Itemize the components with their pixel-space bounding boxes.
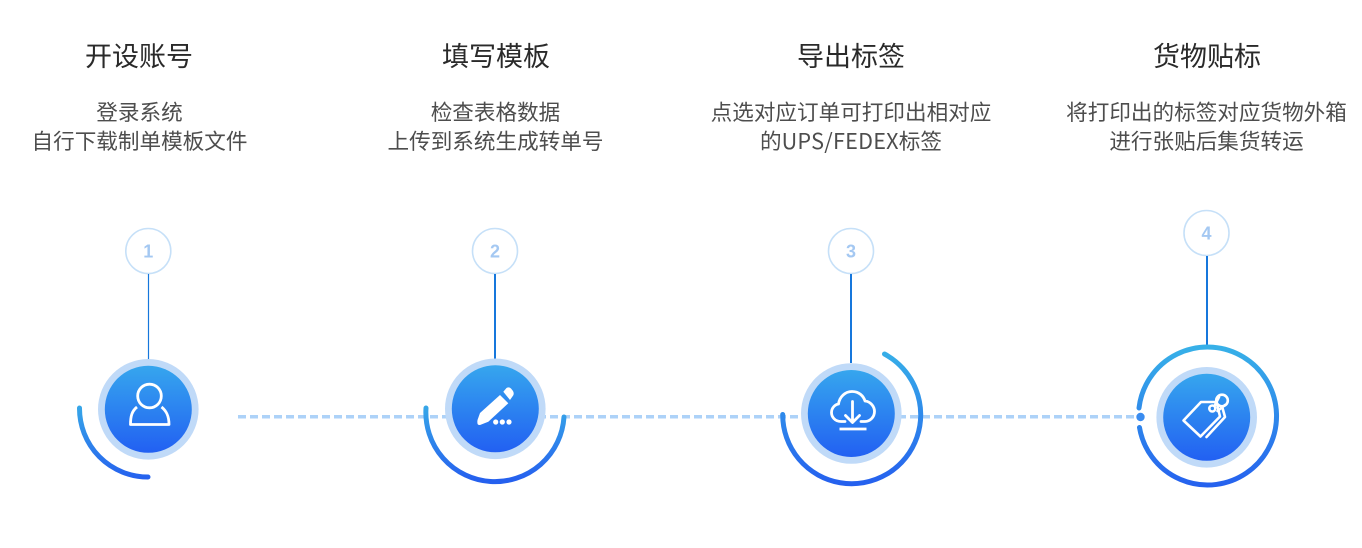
icon: cloud download: [832, 392, 874, 429]
progress arc 2: [426, 408, 564, 482]
text: step 3 description: 点选对应订单可打印出相对应: [711, 100, 991, 125]
stem line 2: [494, 274, 496, 363]
text: step 3 description: 的UPS/FEDEX标签: [760, 125, 942, 156]
number badge 4: [1184, 210, 1229, 256]
icon circle 1: [98, 359, 199, 460]
progress ring 4: [1139, 347, 1277, 485]
progress arc 1: [79, 408, 148, 477]
progress arc 3: [783, 354, 921, 484]
text: step 4 description: [1066, 100, 1347, 154]
stem line 1: [148, 274, 150, 360]
text: step 1 description: 登录系统: [96, 100, 183, 125]
icon: person: [130, 384, 169, 424]
stem line 3: [850, 274, 852, 363]
step 2 node: [426, 228, 564, 482]
text: step 3 description: [711, 100, 991, 156]
heading: step 4: 货物贴标: [1153, 42, 1261, 72]
dashed connector line: [238, 415, 1140, 419]
text: step 1 description: [32, 100, 247, 154]
text: step 4 description: 将打印出的标签对应货物外箱: [1066, 100, 1347, 125]
icon: price tags: [1184, 395, 1228, 437]
number badge 1: [126, 228, 171, 274]
text: step 1 description: 自行下载制单模板文件: [32, 129, 247, 154]
icon circle 3: [801, 363, 902, 464]
icon circle 4: [1156, 367, 1257, 468]
number badge 3: 3: [846, 242, 856, 262]
number badge 2: [472, 228, 518, 274]
heading: step 3: 导出标签: [797, 42, 905, 72]
ring marker dot: [1136, 413, 1145, 421]
step 3 node: [783, 228, 921, 484]
heading: step 2: 填写模板: [442, 42, 550, 72]
step 4 node: [1136, 210, 1277, 485]
text: step 2 description: 检查表格数据: [431, 100, 560, 125]
number badge 3: [828, 228, 874, 274]
stem line 4: [1206, 256, 1208, 345]
heading: step 1: 开设账号: [85, 42, 193, 72]
step 1 node: [79, 228, 199, 477]
text: step 2 description: [388, 100, 603, 154]
number badge 1: 1: [143, 242, 153, 262]
number badge 2: 2: [490, 242, 500, 262]
number badge 4: 4: [1201, 224, 1212, 244]
icon circle 2: [445, 358, 546, 459]
text: step 4 description: 进行张贴后集货转运: [1109, 129, 1304, 154]
text: step 2 description: 上传到系统生成转单号: [388, 129, 603, 154]
icon: pencil with dots: [477, 387, 514, 425]
